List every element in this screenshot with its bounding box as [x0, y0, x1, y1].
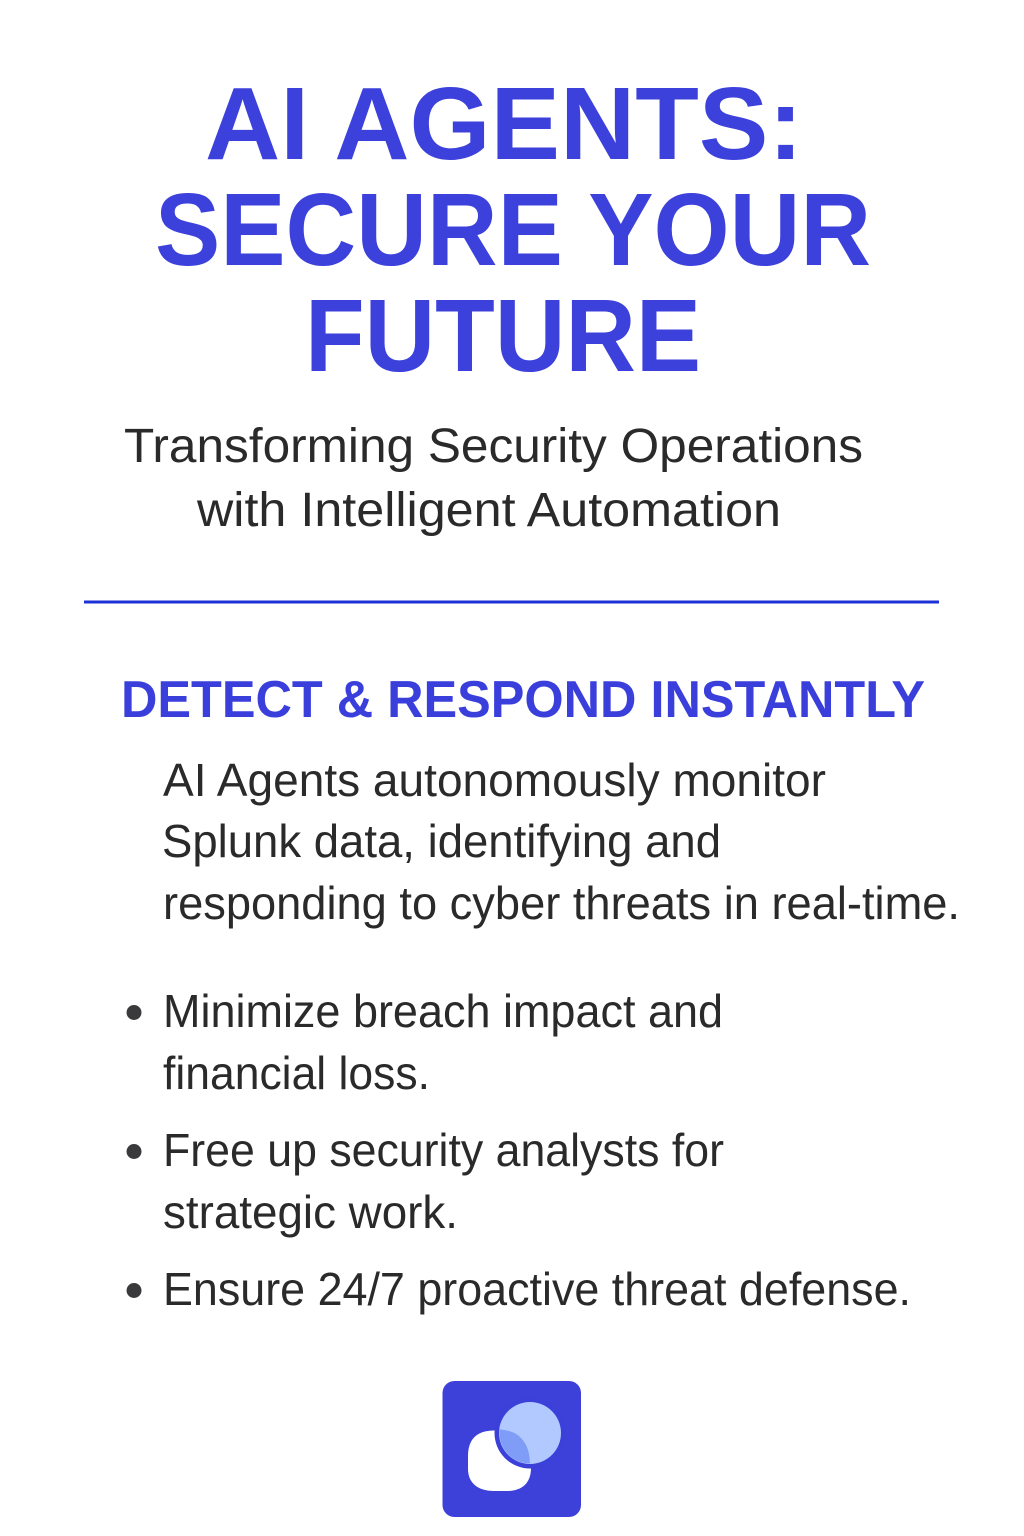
section heading: DETECT & RESPOND INSTANTLY	[121, 671, 925, 729]
bullet: minimize breach impact	[126, 985, 723, 1099]
bullet: free up analysts: strategic work.	[163, 1186, 458, 1238]
subtitle	[124, 420, 863, 537]
bullet: free up analysts: Free up security analysts for	[163, 1124, 724, 1176]
title: SECURE YOUR	[155, 172, 871, 287]
bullet: minimize breach impact: Minimize breach impact and	[163, 985, 723, 1037]
body paragraph	[162, 754, 960, 929]
body paragraph: responding to cyber threats in real-time.	[163, 877, 960, 929]
title: AI AGENTS:	[205, 66, 803, 181]
bullet: proactive defense: Ensure 24/7 proactive threat defense.	[163, 1263, 911, 1315]
body paragraph: AI Agents autonomously monitor	[163, 754, 826, 806]
title	[155, 66, 871, 393]
body paragraph: Splunk data, identifying and	[162, 815, 721, 867]
bullet list	[126, 985, 911, 1315]
bullet: free up analysts	[126, 1124, 724, 1238]
subtitle: with Intelligent Automation	[196, 484, 781, 537]
subtitle: Transforming Security Operations	[124, 420, 863, 473]
title: FUTURE	[305, 278, 701, 393]
bullet: minimize breach impact: financial loss.	[163, 1047, 430, 1099]
icon: logo with overlapping shapes	[442, 1381, 581, 1517]
